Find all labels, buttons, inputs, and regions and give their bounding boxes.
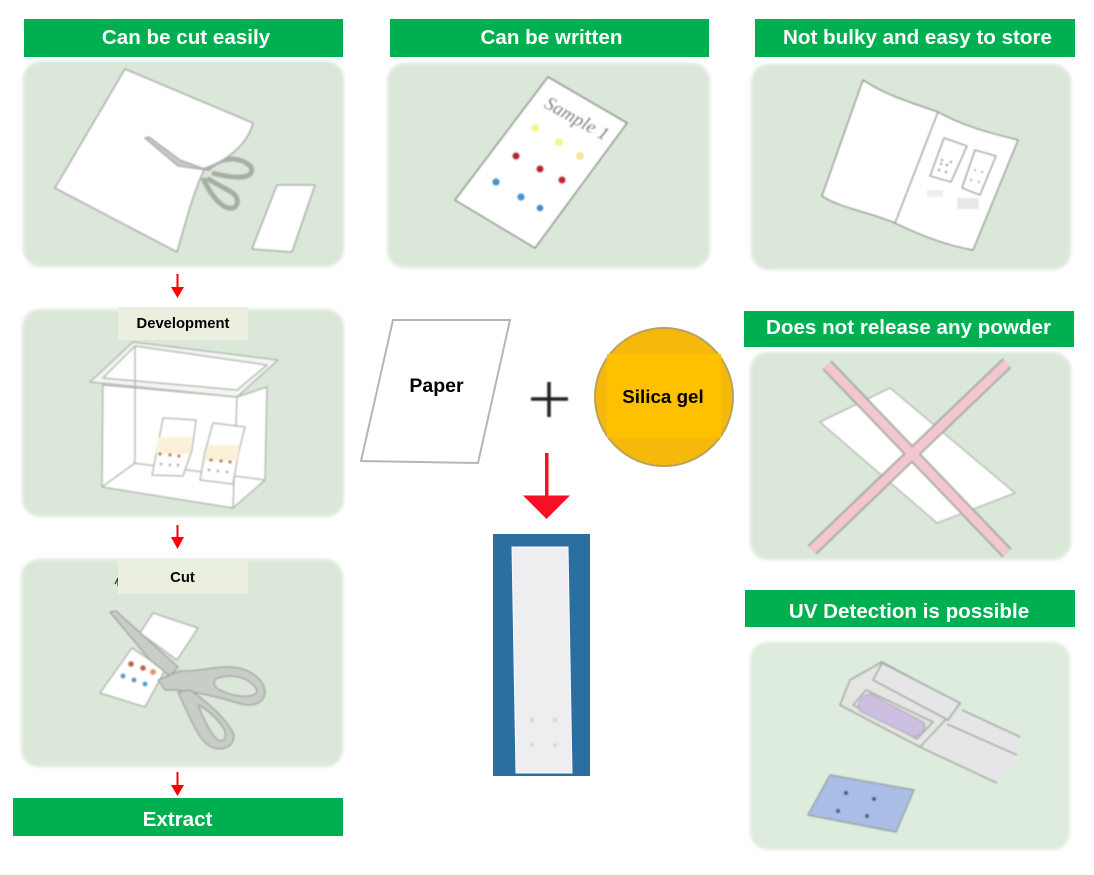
icon: sample spots: [492, 124, 584, 212]
icon: TLC plate photo: [493, 534, 590, 776]
label: paper: Paper: [409, 375, 464, 397]
arrow: cut to extract: [171, 772, 184, 796]
heading: UV detection: UV Detection is possible: [789, 600, 1029, 623]
heading: not bulky: [755, 19, 1075, 57]
icon: development tank: [90, 342, 278, 508]
arrow: cut to development: [171, 274, 184, 298]
panel: UV detection: [750, 642, 1070, 850]
arrow: development to cut: [171, 525, 184, 549]
text: handwritten sample label: Sample 1: [541, 93, 612, 145]
heading: not bulky: Not bulky and easy to store: [783, 26, 1052, 49]
label: silica gel: Silica gel: [622, 386, 704, 407]
arrow: combine to plate: [523, 453, 570, 519]
panel: written sample sheet: [387, 63, 710, 268]
label: cut: [118, 561, 248, 594]
heading: extract: [13, 798, 343, 836]
icon: pink cross: [812, 363, 1007, 553]
icon: paper: [361, 320, 510, 463]
panel: development: [22, 307, 344, 517]
label: development: [118, 307, 248, 340]
heading: extract: Extract: [143, 808, 213, 831]
panel: cut: [21, 559, 343, 767]
label: development: Development: [137, 316, 230, 332]
label: cut: Cut: [170, 570, 195, 586]
heading: does not release powder: [744, 311, 1074, 347]
icon: scissor blade: [145, 137, 207, 170]
icon: paper strip: [820, 388, 1015, 523]
label: hidden text fragment: [115, 578, 118, 586]
panel: folded storage sheet: [751, 64, 1071, 270]
heading: UV detection: [745, 590, 1075, 627]
icon: folder with plates: [822, 80, 1018, 250]
heading: does not release powder: Does not release any powder: [766, 316, 1051, 339]
icon: plus: [531, 382, 568, 417]
panel: paper and scissors: [23, 61, 344, 267]
icon: scissors handles: [203, 159, 252, 208]
icon: paper sheet: [55, 69, 253, 252]
icon: plate under UV: [808, 775, 914, 832]
heading: can be written: Can be written: [481, 26, 622, 49]
icon: sheet: [455, 77, 627, 248]
heading: can be written: [390, 19, 709, 57]
icon: cut slip: [252, 185, 315, 252]
heading: can be cut easily: [24, 19, 343, 57]
panel: no powder: [750, 352, 1071, 560]
heading: can be cut easily: Can be cut easily: [102, 26, 271, 49]
icon: UV lamp: [840, 662, 1020, 783]
icon: cut plate and scissors: [100, 611, 265, 749]
icon: silica gel circle: [595, 328, 733, 466]
